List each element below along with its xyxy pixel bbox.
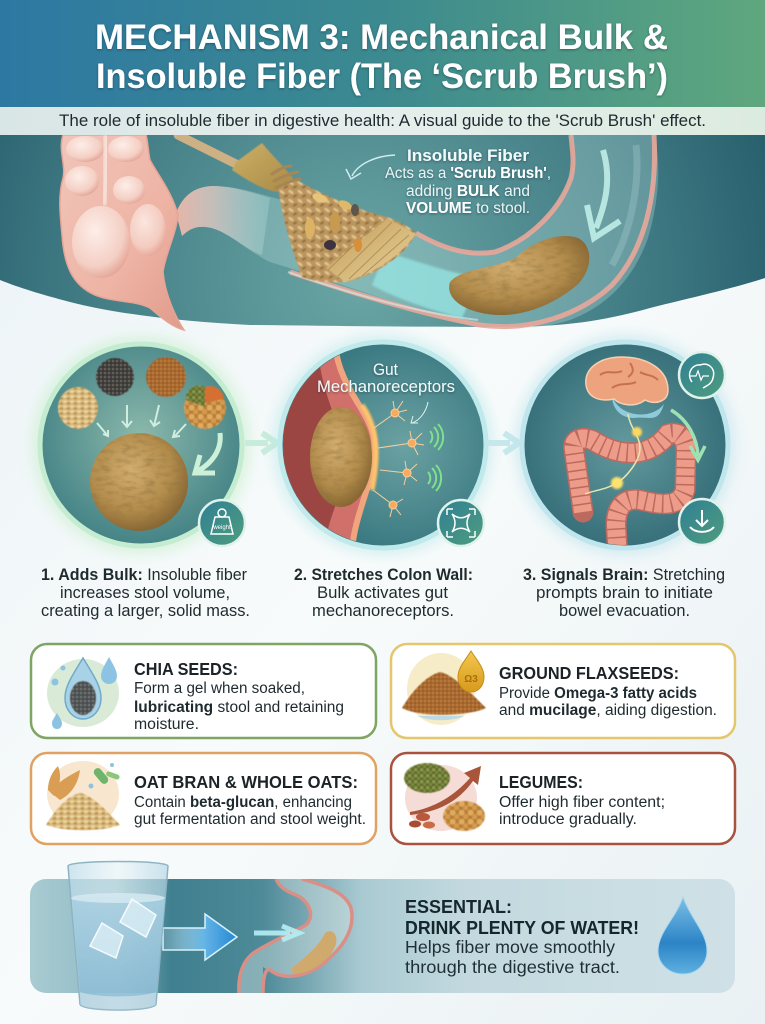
- panel: step 3 signals brain: [514, 334, 736, 560]
- text: step 1 caption: increases stool volume,: [60, 583, 230, 602]
- nerve signal path: [585, 414, 642, 494]
- panel: oat bran and whole oats: gut fermentation and stool weight.: [134, 811, 366, 828]
- panel: ground flaxseeds: [391, 644, 735, 738]
- icon: stretch badge: [438, 500, 484, 546]
- arrows into mass: [97, 405, 186, 437]
- callout: insoluble fiber: adding BULK and: [406, 183, 530, 200]
- down arrow: [671, 410, 705, 460]
- panel: chia seeds: [31, 644, 376, 738]
- icon: weight badge: weight: [212, 525, 231, 531]
- panel: legumes: [391, 753, 735, 844]
- colon wall: [283, 354, 380, 542]
- icon: flax and oil: [402, 651, 486, 725]
- pointer arrow: [411, 402, 428, 423]
- panel: water essential: [30, 879, 735, 993]
- arrow to intestine: [254, 926, 299, 940]
- text: step 2 caption: 2. Stretches Colon Wall:: [294, 565, 473, 584]
- icon: evacuation badge: [679, 499, 725, 545]
- callout: insoluble fiber: Insoluble Fiber: [407, 146, 529, 165]
- water trail behind brush: [372, 252, 480, 318]
- panel: chia seeds: Form a gel when soaked,: [134, 680, 305, 697]
- panel: oat bran and whole oats: OAT BRAN & WHOLE OATS:: [134, 772, 358, 792]
- text: step 3 caption: [523, 565, 725, 620]
- panel: chia seeds: CHIA SEEDS:: [134, 659, 238, 679]
- cyan flow arrow: [587, 150, 620, 238]
- icon: flax and oil: Ω3: [464, 674, 478, 685]
- arrow: step 2 to step 3: [488, 433, 519, 453]
- icon: weight badge: [199, 500, 245, 546]
- curved arrow: [195, 433, 220, 473]
- text: step 3 caption: bowel evacuation.: [559, 601, 690, 620]
- text: step 3 caption: 3. Signals Brain: Stretching: [523, 565, 725, 584]
- callout: insoluble fiber: Acts as a 'Scrub Brush',: [385, 165, 551, 182]
- callout: insoluble fiber: [385, 146, 551, 217]
- title: [0, 0, 765, 107]
- scrub brush: [178, 135, 416, 282]
- ice cubes: [90, 899, 156, 958]
- colon on the left: [60, 135, 184, 330]
- text: step 1 caption: 1. Adds Bulk: Insoluble fiber: [41, 565, 247, 584]
- icon: oats and gut bacteria: [46, 761, 120, 830]
- panel: step 2 stretches colon wall: [272, 334, 494, 556]
- subtitle band: The role of insoluble fiber in digestive health: A visual guide to the 'Scrub Brush' effect.: [59, 111, 706, 130]
- title: MECHANISM 3: Mechanical Bulk &: [95, 18, 668, 57]
- stool against wall: [310, 407, 372, 507]
- panel: oat bran and whole oats: [31, 753, 376, 844]
- panel: legumes: Offer high fiber content;: [499, 794, 665, 811]
- subtitle band: [0, 107, 765, 135]
- callout: insoluble fiber: VOLUME to stool.: [406, 200, 530, 217]
- icon: glass of water: [68, 862, 168, 1010]
- text: step 1 caption: [41, 565, 250, 620]
- text: essential: [405, 896, 639, 977]
- label: gut mechanoreceptors: Mechanoreceptors: [317, 378, 455, 396]
- text: essential: through the digestive tract.: [405, 957, 620, 977]
- stool mass: [449, 236, 589, 315]
- panel: step 1 adds bulk: [31, 335, 251, 555]
- text: step 2 caption: mechanoreceptors.: [312, 601, 454, 620]
- text: essential: ESSENTIAL:: [405, 896, 512, 917]
- text: step 1 caption: creating a larger, solid mass.: [41, 601, 250, 620]
- title: Insoluble Fiber (The ‘Scrub Brush’): [96, 57, 668, 96]
- panel: ground flaxseeds: Provide Omega-3 fatty acids: [499, 685, 697, 702]
- label: gut mechanoreceptors: Gut: [373, 361, 398, 379]
- arrow: glass to intestine: [163, 914, 237, 960]
- panel: ground flaxseeds: and mucilage, aiding digestion.: [499, 702, 717, 719]
- icon: brain: [586, 357, 668, 418]
- translucent colon tube: [176, 135, 658, 328]
- icon: legumes and rising arrow: [404, 763, 485, 831]
- panel: chia seeds: moisture.: [134, 716, 199, 733]
- panel: ground flaxseeds: GROUND FLAXSEEDS:: [499, 663, 679, 683]
- colon: [574, 433, 686, 560]
- icon: brain badge: [679, 352, 725, 398]
- label: gut mechanoreceptors: [317, 361, 455, 396]
- intestine illustration: [239, 879, 352, 993]
- icon: water drop: [658, 897, 707, 974]
- panel: oat bran and whole oats: Contain beta-glucan, enhancing: [134, 794, 352, 811]
- text: essential: DRINK PLENTY OF WATER!: [405, 917, 639, 938]
- signal waves: [428, 424, 443, 491]
- panel: legumes: LEGUMES:: [499, 772, 583, 792]
- icon: chia drop: [47, 657, 119, 729]
- icon: seed piles: [58, 357, 226, 429]
- text: step 3 caption: prompts brain to initiate: [536, 583, 713, 602]
- stool ball: [90, 433, 188, 531]
- panel: legumes: introduce gradually.: [499, 811, 637, 828]
- text: step 2 caption: Bulk activates gut: [317, 583, 448, 602]
- stool in intestine: [291, 931, 336, 974]
- hero illustration: colon and scrub brush: [0, 135, 765, 335]
- mechanoreceptor neurons: [373, 401, 424, 517]
- arrow: step 1 to step 2: [245, 433, 277, 453]
- text: step 2 caption: [294, 565, 473, 620]
- text: essential: Helps fiber move smoothly: [405, 937, 615, 957]
- callout pointer arrow: [346, 155, 395, 179]
- panel: chia seeds: lubricating stool and retaining: [134, 699, 344, 716]
